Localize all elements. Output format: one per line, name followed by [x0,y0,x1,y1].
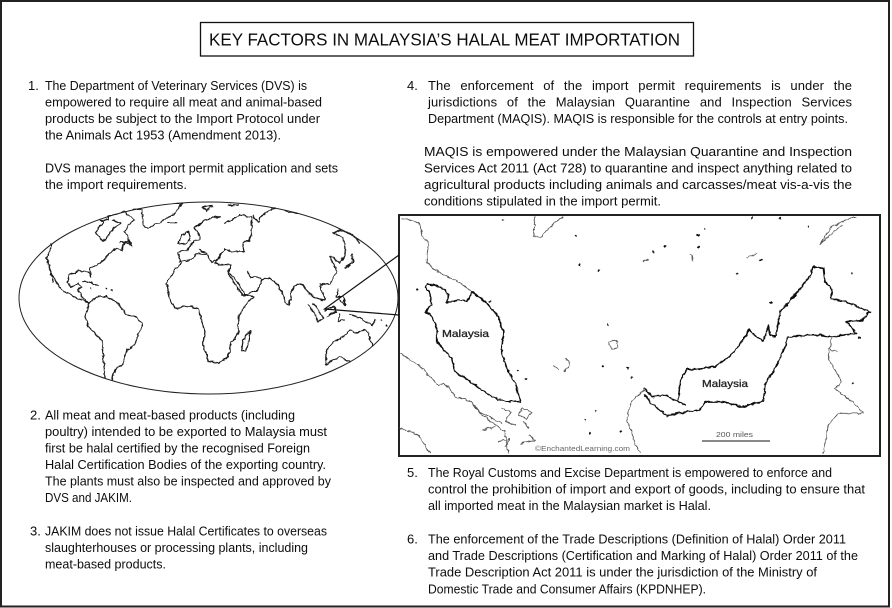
copyright credit: ©EnchantedLearning.com [535,444,630,453]
text block: factor 5: all imported meat in the Malaysian market is Halal. [428,498,711,513]
text block: factor 2: The plants must also be inspected and approved by [45,474,331,489]
australia [326,329,373,364]
peninsular malaysia outline [425,283,521,402]
east malaysia outline [645,267,870,416]
text block: factor 2: poultry) intended to be exported to Malaysia must [45,424,327,439]
text block: factor 2: Halal Certification Bodies of the exporting country. [45,457,326,472]
text block: factor 5: 5. [407,465,418,480]
text block: factor 2: All meat and meat-based products (including [45,408,295,422]
text block: factor 1: the Animals Act 1953 (Amendment 2013). [45,128,281,142]
south america [85,297,142,380]
text block: factor 5 [407,465,865,513]
scale bar: 200 miles [716,430,753,439]
text block: factor 5: control the prohibition of import and export of goods, including to ensure that [428,482,865,497]
text block: factor 3 [30,523,327,571]
world map [19,202,398,394]
small islands [472,253,837,447]
text block: factor 6: Domestic Trade and Consumer Affairs (KPDNHEP). [428,581,706,596]
text block: factor 3: JAKIM does not issue Halal Certificates to overseas [45,523,327,538]
text block: factor 4 [407,78,852,209]
text block: factor 1: 1. [28,78,39,93]
malaysia map panel [399,215,880,456]
islands [83,205,375,325]
scale bar [702,430,770,441]
text block: factor 6: 6. [407,531,418,546]
text block: factor 1: The Department of Veterinary Services (DVS) is [45,78,307,93]
africa [167,263,253,363]
text block: factor 4: jurisdictions of the Malaysian Quarantine and Inspection Services [427,94,852,110]
text block: factor 1: DVS manages the import permit application and sets [45,160,338,176]
madagascar [242,331,250,352]
north america [47,212,135,303]
text block: factor 4: MAQIS is empowered under the Malaysian Quarantine and Inspection [424,144,852,159]
greenland [133,203,182,228]
text block: factor 3: meat-based products. [45,556,166,571]
eurasia [178,208,360,305]
text block: factor 2: first be halal certified by the recognised Foreign [45,441,310,456]
text block: factor 2: 2. [30,408,41,422]
text block: factor 3: 3. [30,523,41,538]
text block: factor 6: and Trade Descriptions (Certification and Marking of Halal) Order 2011 of the [428,548,858,563]
text block: factor 4: 4. [407,78,418,93]
text block: factor 2: DVS and JAKIM. [45,490,132,505]
text block: factor 6 [407,531,858,596]
text block: factor 3: slaughterhouses or processing plants, including [45,540,308,555]
neighbouring coastlines [400,217,863,453]
text block: factor 1: the import requirements. [45,177,187,192]
text block: factor 1: empowered to require all meat and animal-based [45,94,322,110]
text block: factor 5: The Royal Customs and Excise Department is empowered to enforce and [428,465,832,480]
title: KEY FACTORS IN MALAYSIA’S HALAL MEAT IMPORTATION [209,30,680,50]
text block: factor 1 [28,78,338,192]
title [200,22,694,56]
text block: factor 4: conditions stipulated in the import permit. [424,194,661,209]
text block: factor 1: products be subject to the Import Protocol under [45,111,321,126]
text block: factor 4: Services Act 2011 (Act 728) to quarantine and inspect anything related to [424,161,852,176]
text block: factor 6: Trade Description Act 2011 is under the jurisdiction of the Ministry of [428,565,817,580]
callout lines: world map to malaysia map [324,255,399,315]
label: Malaysia west: Malaysia [442,328,489,340]
text block: factor 6: The enforcement of the Trade Descriptions (Definition of Halal) Order 2011 [428,531,846,546]
text block: factor 4: Department (MAQIS). MAQIS is responsible for the controls at entry points. [428,111,848,126]
text block: factor 4: agricultural products including animals and carcasses/meat vis-a-vis the [424,177,852,192]
text block: factor 4: The enforcement of the import permit requirements is under the [428,78,852,93]
text block: factor 2 [30,408,331,505]
label: Malaysia east: Malaysia [702,378,748,390]
